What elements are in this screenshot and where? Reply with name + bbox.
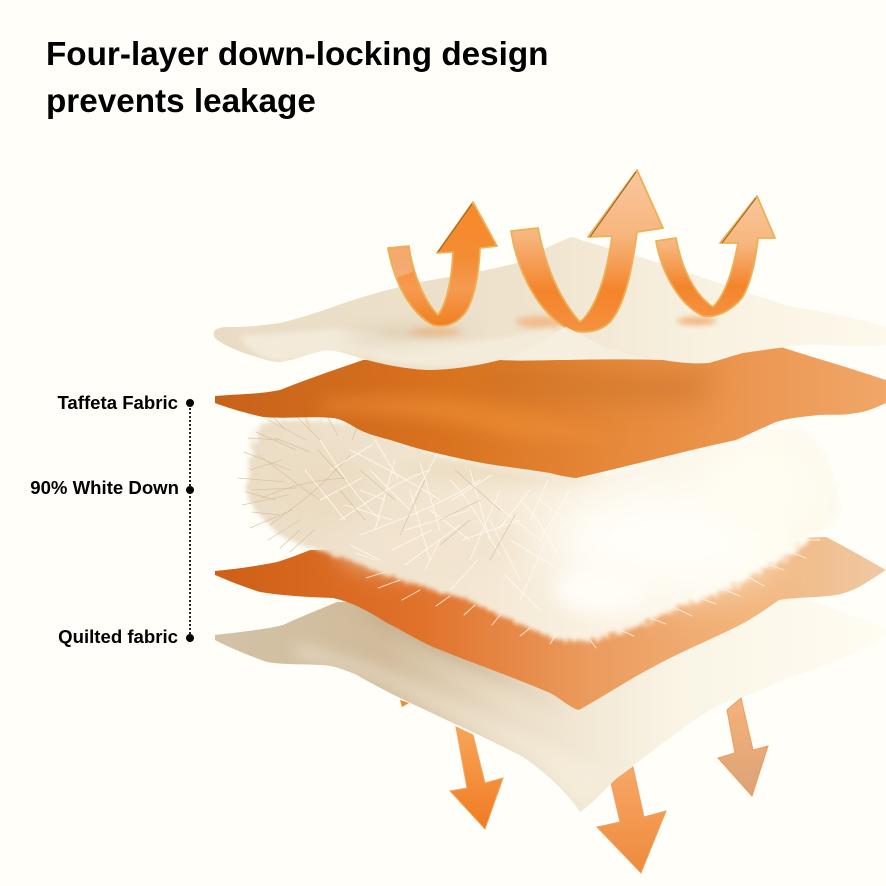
fur highlights and shadow: [279, 454, 810, 614]
fur body: [248, 420, 840, 641]
layer: lower taffeta fabric: [215, 537, 886, 710]
label: quilted fabric: Quilted fabric: [58, 626, 178, 647]
arrow: curved up arrow right: [656, 196, 775, 316]
fabric fold in front of middle arrow: [500, 327, 663, 361]
fringe over lower fabric: [356, 540, 820, 648]
layer: upper taffeta fabric: [215, 347, 886, 478]
title: Four-layer down-locking design: [46, 36, 548, 73]
layered fabric illustration: [214, 169, 886, 874]
arrow: down arrow right: [718, 698, 768, 796]
arrow: curved up arrow left: [388, 202, 497, 326]
wispy strands left: [238, 414, 360, 552]
fabric shading and arrow shadows: [240, 316, 717, 366]
marker: taffeta fabric: [186, 399, 194, 407]
callout line with markers: [186, 399, 194, 642]
feather down filling: [238, 414, 840, 648]
arrow: down arrow left: [450, 727, 503, 829]
title: prevents leakage: [46, 83, 316, 120]
marker: quilted fabric: [186, 634, 194, 642]
layer: quilted fabric: [215, 598, 886, 812]
layer: top cream fabric: [214, 237, 886, 370]
title: [46, 36, 548, 120]
arrow: small hidden tip: [400, 700, 409, 707]
label: 90% white down: 90% White Down: [30, 477, 179, 498]
wispy strands centre: [305, 440, 620, 610]
marker: white down: [186, 486, 194, 494]
arrow: down arrow middle: [597, 767, 666, 873]
arrow: curved up arrow middle: [511, 170, 663, 332]
label: taffeta fabric: Taffeta Fabric: [57, 392, 178, 413]
